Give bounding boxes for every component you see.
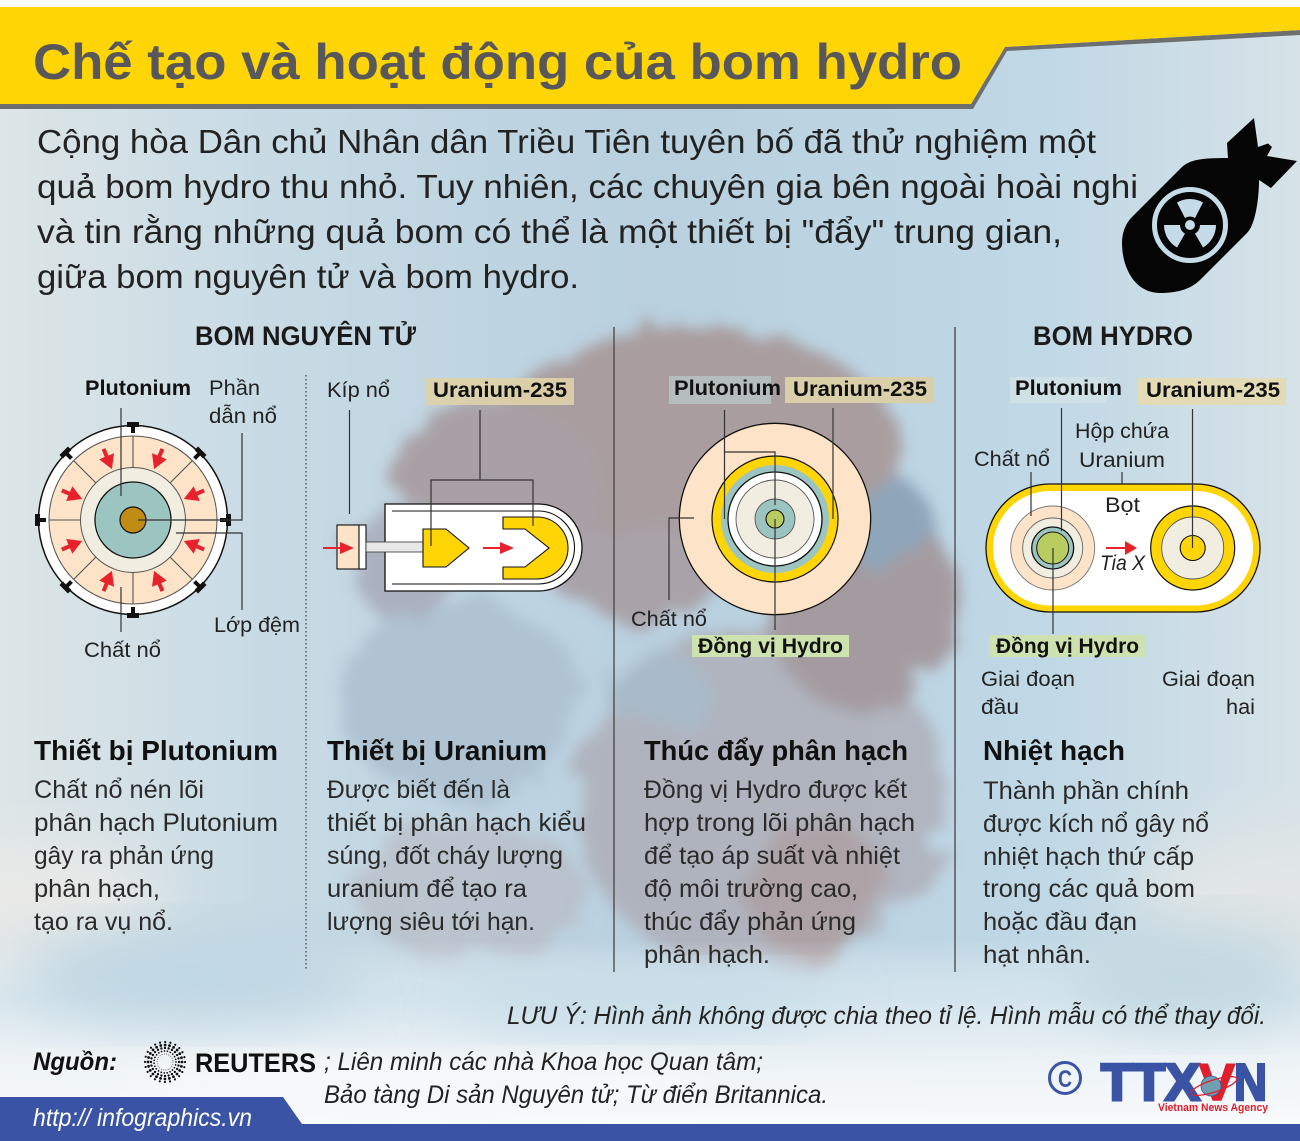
text: plutonium description: phân hạch Plutonium xyxy=(34,809,278,837)
Reuters wordmark: REUTERS xyxy=(195,1048,316,1078)
label: Bọt: Bọt xyxy=(1105,494,1140,517)
label: Hộp chứa Uranium: Uranium xyxy=(1079,449,1165,472)
text: plutonium description: phân hạch, xyxy=(34,875,160,903)
intro text: và tin rằng những quả bom có thể là một thiết bị "đẩy" trung gian, xyxy=(37,213,1062,250)
label: Tia X: Tia X xyxy=(1100,552,1146,575)
heading: Thiết bị Uranium: Thiết bị Uranium xyxy=(327,735,547,766)
intro text xyxy=(37,123,1138,295)
heading: BOM HYDRO: BOM HYDRO xyxy=(1033,321,1193,351)
source text xyxy=(324,1048,828,1109)
text: uranium description xyxy=(327,776,586,936)
text: uranium description: Được biết đến là xyxy=(327,776,510,804)
intro text: quả bom hydro thu nhỏ. Tuy nhiên, các chuyên gia bên ngoài hoài nghi xyxy=(37,168,1138,205)
label: Đồng vị Hydro: Đồng vị Hydro xyxy=(698,635,843,658)
diagram: plutonium implosion xyxy=(35,408,242,632)
label: Phần dẫn nổ: Phần xyxy=(209,377,260,400)
source label: Nguồn: xyxy=(33,1048,117,1076)
logo: TTXVN: N xyxy=(1234,1054,1267,1112)
logo: TTXVN: Vietnam News Agency xyxy=(1158,1102,1269,1114)
heading: Thiết bị Plutonium: Thiết bị Plutonium xyxy=(34,735,278,766)
diagram: thermonuclear xyxy=(986,408,1260,634)
label: Giai đoạn hai xyxy=(1162,668,1255,719)
label: Plutonium: Plutonium xyxy=(1015,377,1122,400)
text: thermonuclear description: được kích nổ gây nổ xyxy=(983,810,1209,838)
text: thermonuclear description: nhiệt hạch thứ cấp xyxy=(983,843,1194,871)
note: LƯU Ý: Hình ảnh không được chia theo tỉ lệ. Hình mẫu có thể thay đổi. xyxy=(507,1001,1266,1030)
text: thermonuclear description: trong các quả bom xyxy=(983,875,1195,903)
label: Chất nổ: Chất nổ xyxy=(84,639,161,662)
logo: TTXVN xyxy=(1050,1054,1269,1114)
label: Giai đoạn hai: hai xyxy=(1226,696,1255,719)
footer url: http:// infographics.vn xyxy=(33,1104,252,1132)
label: Giai đoạn đầu: Giai đoạn xyxy=(981,668,1075,691)
text: uranium description: uranium để tạo ra xyxy=(327,875,527,903)
panel: thermonuclear xyxy=(974,377,1286,969)
heading: BOM NGUYÊN TỬ: BOM NGUYÊN TỬ xyxy=(195,319,417,351)
text: uranium description: súng, đốt cháy lượng xyxy=(327,842,563,870)
text: plutonium description: tạo ra vụ nổ. xyxy=(34,908,173,936)
footer bar xyxy=(0,1097,1300,1141)
label: Hộp chứa Uranium xyxy=(1075,420,1169,472)
source text: ; Liên minh các nhà Khoa học Quan tâm; xyxy=(324,1048,763,1076)
text: thermonuclear description: hạt nhân. xyxy=(983,941,1091,969)
text: plutonium description: gây ra phản ứng xyxy=(34,842,214,870)
text: boosted fission description: độ môi trường cao, xyxy=(644,875,858,903)
logo: TTXVN: V xyxy=(1199,1054,1235,1112)
label: Kíp nổ: Kíp nổ xyxy=(327,379,390,402)
text: plutonium description: Chất nổ nén lõi xyxy=(34,776,204,804)
label: Uranium-235: Uranium-235 xyxy=(433,379,567,402)
label: Phần dẫn nổ: dẫn nổ xyxy=(209,405,277,428)
label: Chất nổ: Chất nổ xyxy=(631,608,707,631)
label: Giai đoạn đầu: đầu xyxy=(981,696,1019,719)
heading: Nhiệt hạch: Nhiệt hạch xyxy=(983,735,1125,766)
label: Giai đoạn đầu xyxy=(981,668,1075,719)
text: uranium description: lượng siêu tới hạn. xyxy=(327,908,535,936)
title banner xyxy=(0,0,1300,109)
title: Chế tạo và hoạt động của bom hydro xyxy=(33,34,962,90)
text: boosted fission description: để tạo áp suất và nhiệt xyxy=(644,842,900,870)
label: Hộp chứa Uranium: Hộp chứa xyxy=(1075,420,1169,443)
label: Giai đoạn hai: Giai đoạn xyxy=(1162,668,1255,691)
text: thermonuclear description: Thành phần chính xyxy=(983,777,1189,805)
text: boosted fission description: hợp trong lõi phân hạch xyxy=(644,809,915,837)
source text: Bảo tàng Di sản Nguyên tử; Từ điển Britannica. xyxy=(324,1081,828,1109)
label: Phần dẫn nổ xyxy=(209,377,277,428)
intro text: giữa bom nguyên tử và bom hydro. xyxy=(37,258,579,295)
panel: plutonium device xyxy=(34,377,300,936)
intro text: Cộng hòa Dân chủ Nhân dân Triều Tiên tuyên bố đã thử nghiệm một xyxy=(37,123,1096,160)
diagram: boosted fission xyxy=(669,408,871,630)
text: plutonium description xyxy=(34,776,278,936)
heading: Thúc đẩy phân hạch: Thúc đẩy phân hạch xyxy=(644,735,908,766)
text: thermonuclear description: hoặc đầu đạn xyxy=(983,908,1137,936)
text: thermonuclear description xyxy=(983,777,1209,969)
panel: uranium device xyxy=(323,378,586,936)
icon: nuclear bomb xyxy=(1122,118,1297,293)
panel: boosted fission xyxy=(631,376,934,969)
icon: Reuters logo xyxy=(145,1042,185,1082)
label: Plutonium: Plutonium xyxy=(85,377,191,400)
text: boosted fission description: Đồng vị Hydro được kết xyxy=(644,776,907,804)
label: Chất nổ: Chất nổ xyxy=(974,448,1050,471)
label: Đồng vị Hydro: Đồng vị Hydro xyxy=(996,635,1139,658)
logo: TTXVN: TTX xyxy=(1101,1054,1200,1112)
label: Plutonium: Plutonium xyxy=(674,377,781,400)
label: Uranium-235: Uranium-235 xyxy=(793,378,927,401)
text: boosted fission description xyxy=(644,776,915,969)
logo: TTXVN: C xyxy=(1058,1066,1072,1093)
diagram: uranium gun type xyxy=(323,410,582,591)
label: Uranium-235: Uranium-235 xyxy=(1146,379,1280,402)
text: boosted fission description: phân hạch. xyxy=(644,941,770,969)
label: Lớp đệm: Lớp đệm xyxy=(214,614,300,637)
text: boosted fission description: thúc đẩy phản ứng xyxy=(644,908,856,936)
text: uranium description: thiết bị phân hạch kiểu xyxy=(327,809,586,837)
